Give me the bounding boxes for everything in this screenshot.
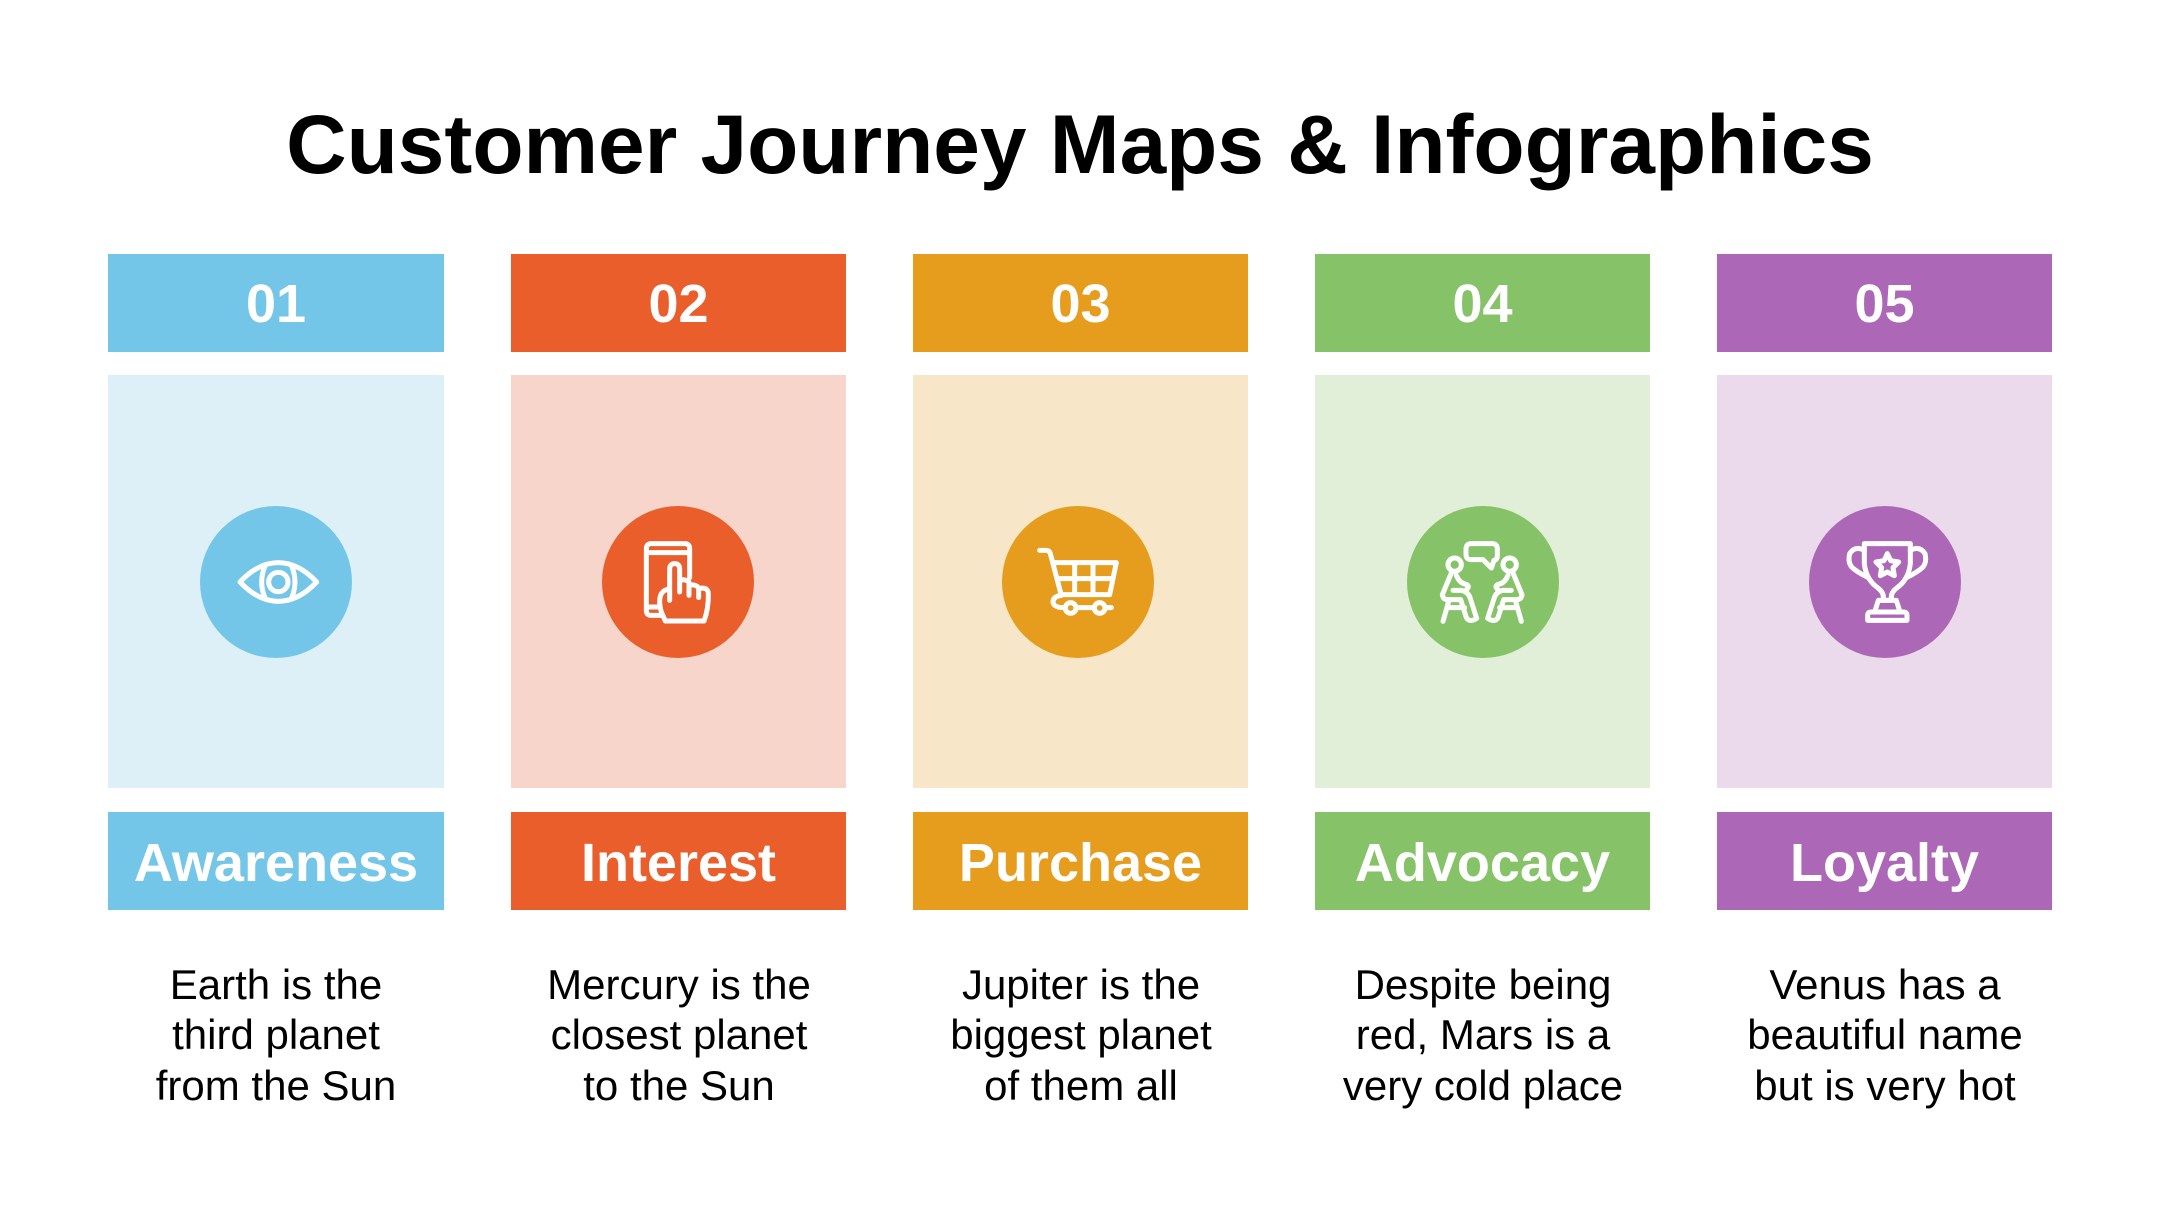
description: Jupiter is the <box>962 960 1200 1008</box>
panel: step 03 purchase <box>913 254 1248 1108</box>
stage label <box>1315 812 1650 910</box>
title: Customer Journey Maps & Infographics <box>286 97 1874 191</box>
icon circle: shopping cart <box>1002 506 1154 658</box>
number badge 04 <box>1315 254 1650 352</box>
description: from the Sun <box>156 1062 396 1108</box>
tinted card with icon <box>1717 375 2052 788</box>
description: very cold place <box>1343 1062 1623 1108</box>
stage label: Loyalty <box>1790 833 1979 893</box>
icon circle: phone tap <box>602 506 754 658</box>
description: Venus has a <box>1769 960 2001 1008</box>
panel: step 01 awareness <box>108 254 444 1108</box>
description <box>950 960 1212 1108</box>
panel: step 05 loyalty <box>1717 254 2052 1108</box>
number badge 02 <box>511 254 846 352</box>
description: to the Sun <box>583 1062 775 1108</box>
tinted card with icon <box>108 375 444 788</box>
description: red, Mars is a <box>1356 1011 1610 1058</box>
description: of them all <box>984 1062 1178 1108</box>
number badge 05: 05 <box>1854 274 1915 334</box>
number badge 04: 04 <box>1452 274 1513 334</box>
number badge 03 <box>913 254 1248 352</box>
stage label <box>108 812 444 910</box>
description: Mercury is the <box>547 960 811 1008</box>
description <box>1747 960 2023 1108</box>
icon circle: two people talking <box>1407 506 1559 658</box>
number badge 02: 02 <box>648 274 709 334</box>
description: closest planet <box>551 1011 807 1058</box>
tinted card with icon <box>511 375 846 788</box>
number badge 03: 03 <box>1050 274 1111 334</box>
stage label <box>913 812 1248 910</box>
stage label: Purchase <box>959 833 1202 893</box>
stage label <box>511 812 846 910</box>
description: Despite being <box>1355 960 1611 1008</box>
number badge 05 <box>1717 254 2052 352</box>
number badge 01: 01 <box>246 274 306 334</box>
stage label: Awareness <box>134 833 418 893</box>
description <box>547 960 811 1108</box>
description <box>156 960 396 1108</box>
description: Earth is the <box>170 960 382 1008</box>
description: biggest planet <box>950 1011 1212 1058</box>
icon circle: trophy <box>1809 506 1961 658</box>
panel: step 02 interest <box>511 254 846 1108</box>
stage label: Advocacy <box>1355 833 1610 893</box>
number badge 01 <box>108 254 444 352</box>
icon circle: eye <box>200 506 352 658</box>
stage label <box>1717 812 2052 910</box>
description: third planet <box>172 1011 380 1058</box>
description <box>1343 960 1623 1108</box>
tinted card with icon <box>913 375 1248 788</box>
panel: step 04 advocacy <box>1315 254 1650 1108</box>
description: beautiful name <box>1747 1011 2023 1058</box>
description: but is very hot <box>1754 1062 2016 1108</box>
tinted card with icon <box>1315 375 1650 788</box>
stage label: Interest <box>581 833 776 893</box>
